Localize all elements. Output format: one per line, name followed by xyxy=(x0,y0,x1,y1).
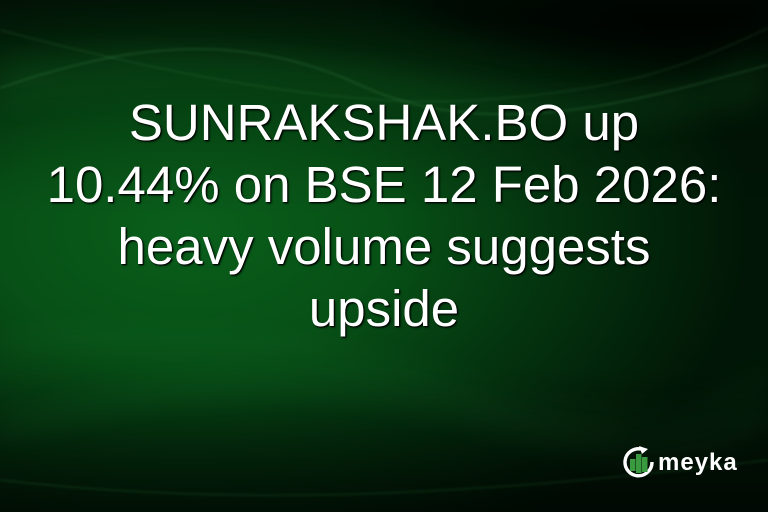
title: heavy volume suggests xyxy=(118,218,650,275)
title: upside xyxy=(309,280,459,337)
title: 10.44% on BSE 12 Feb 2026: xyxy=(47,156,721,213)
wordmark: meyka xyxy=(658,449,738,476)
title xyxy=(47,94,721,339)
title: SUNRAKSHAK.BO up xyxy=(129,94,639,151)
icon: ring with bars xyxy=(625,446,652,476)
logo: meyka xyxy=(623,446,738,478)
